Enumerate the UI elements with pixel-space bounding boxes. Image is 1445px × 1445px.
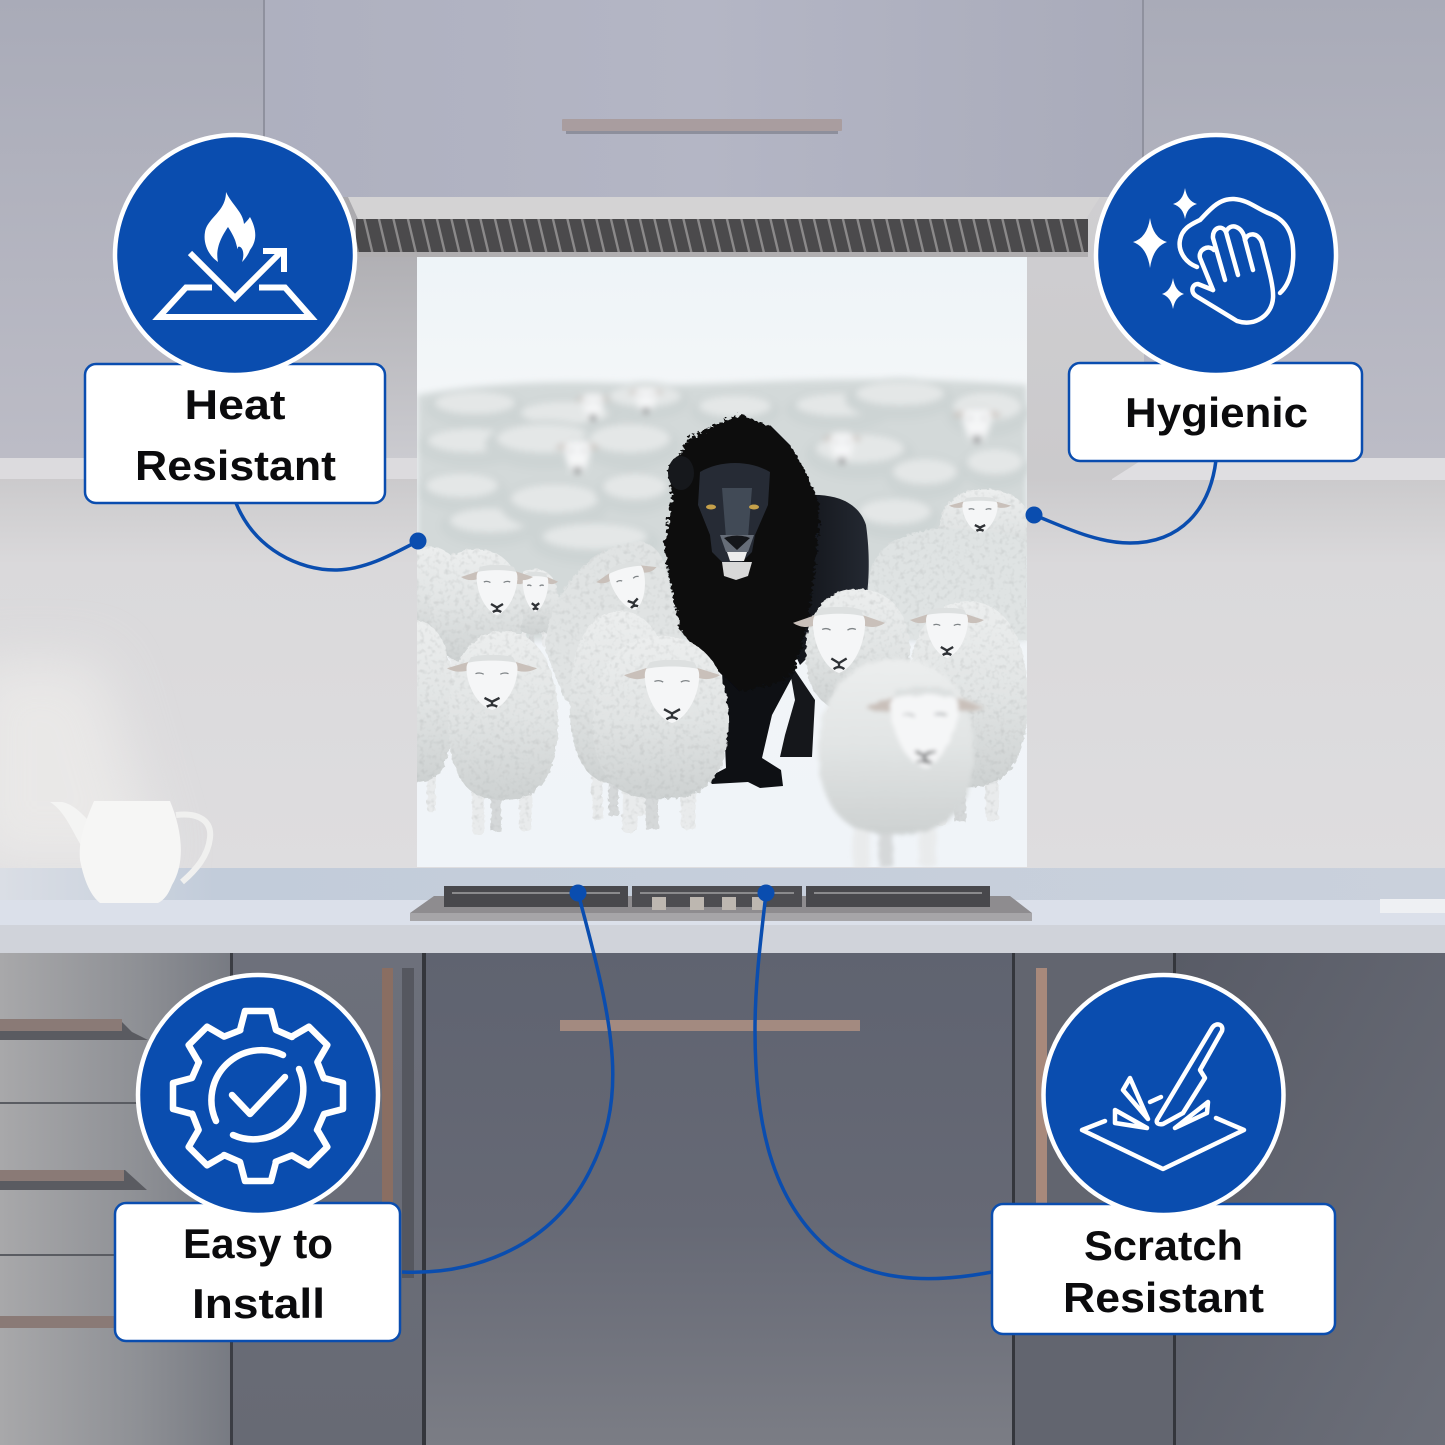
lion body bbox=[770, 495, 869, 665]
sheep right of lion bbox=[804, 588, 911, 706]
wall above shelf left bbox=[264, 197, 418, 459]
teapot bbox=[50, 801, 210, 903]
sheep far right bbox=[907, 601, 1028, 826]
lower handles bbox=[382, 968, 393, 1204]
back left sheep bbox=[520, 568, 559, 648]
centre rear sheep bbox=[568, 610, 657, 820]
upper cabinet centre bbox=[265, 0, 1143, 197]
upper cabinet right bbox=[1144, 0, 1445, 458]
icon: gear with check mark bbox=[173, 1011, 343, 1181]
connector: heat resistant bbox=[236, 503, 426, 570]
connector: scratch resistant bbox=[755, 884, 992, 1279]
black lion bbox=[664, 414, 869, 788]
text: Easy to Install bbox=[183, 1220, 333, 1327]
icon: knife scratching surface bbox=[1082, 1024, 1244, 1169]
cooktop bbox=[410, 886, 1032, 921]
blurred background flock bbox=[417, 378, 1030, 640]
shelf strips bbox=[0, 458, 417, 479]
upper cabinet left bbox=[0, 0, 264, 458]
hood bbox=[348, 197, 1100, 219]
badge: heat resistant icon bbox=[115, 135, 355, 375]
label box: scratch resistant bbox=[992, 1204, 1335, 1334]
text: Easy to Install: Install bbox=[192, 1280, 325, 1327]
sheep front centre bbox=[616, 636, 730, 834]
connector: easy to install bbox=[402, 884, 613, 1272]
soft light on the left wall bbox=[0, 660, 160, 868]
heads of front sheep bbox=[447, 607, 984, 723]
lion front legs bbox=[707, 670, 795, 788]
lower cabinets bbox=[0, 953, 232, 1445]
icon: flame over surface with arrow bbox=[159, 192, 311, 317]
text: Heat Resistant: Resistant bbox=[135, 442, 336, 489]
text: Scratch Resistant: Scratch bbox=[1084, 1222, 1243, 1269]
counter back bbox=[0, 868, 1445, 901]
text: Heat Resistant: Heat bbox=[184, 381, 286, 428]
lion face bbox=[698, 463, 770, 566]
panel sky and snow bbox=[417, 257, 1027, 867]
heads of rear sheep bbox=[461, 497, 1011, 617]
text: Scratch Resistant: Resistant bbox=[1063, 1274, 1264, 1321]
icon: stars and wiping hand bbox=[1133, 188, 1293, 323]
badge: scratch resistant icon bbox=[1044, 975, 1284, 1215]
sheep front left bbox=[448, 631, 558, 835]
label box: easy to install bbox=[115, 1203, 400, 1341]
badge: easy to install icon bbox=[138, 975, 378, 1215]
drawer handles bbox=[0, 1020, 148, 1040]
text: Heat Resistant bbox=[135, 381, 336, 489]
connector: hygienic bbox=[1026, 460, 1216, 543]
badge: hygienic icon bbox=[1096, 135, 1336, 375]
left edge sheep bbox=[417, 620, 452, 812]
lion back leg bbox=[780, 660, 815, 757]
label box: heat resistant bbox=[85, 364, 385, 503]
wall bbox=[0, 478, 1445, 870]
label box: hygienic bbox=[1069, 363, 1362, 461]
text: Scratch Resistant bbox=[1063, 1222, 1264, 1321]
lion mane bbox=[664, 414, 820, 692]
back right sheep bbox=[940, 488, 1027, 546]
text: Hygienic: Hygienic bbox=[1125, 389, 1308, 436]
panel: sheep and black lion splashback bbox=[378, 257, 1031, 871]
blurred foreground sheep bbox=[819, 659, 984, 871]
wall above shelf right bbox=[1027, 197, 1147, 478]
sheep turned towards lion bbox=[545, 542, 682, 702]
top handle bbox=[562, 119, 842, 131]
text: Easy to Install: Easy to bbox=[183, 1220, 333, 1267]
